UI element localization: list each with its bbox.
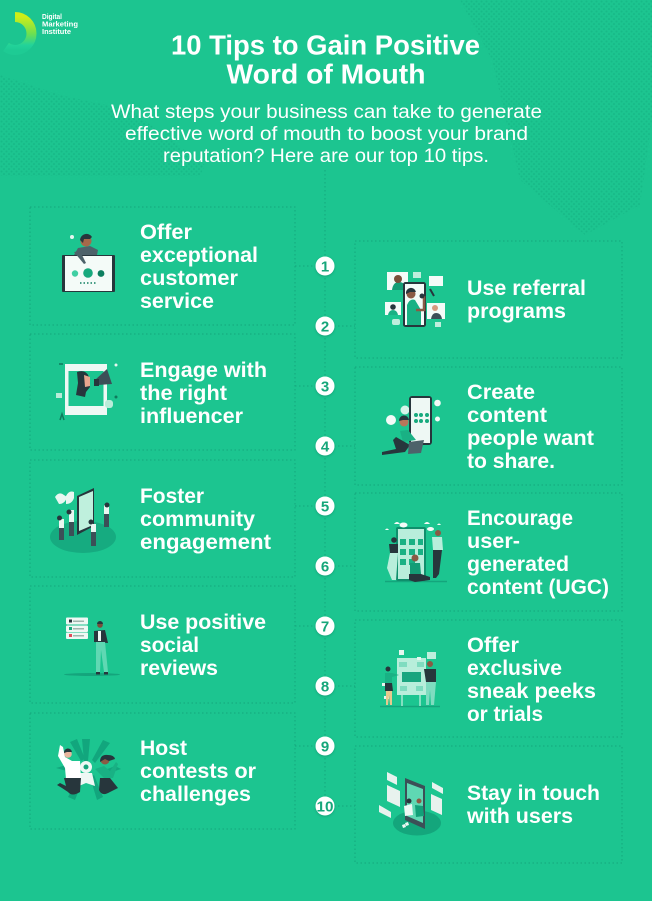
tip 8 text: user- (467, 529, 520, 553)
tip 2 text: Engage with (140, 358, 267, 382)
number badges: 5 (321, 498, 329, 515)
icon: tablet with person (62, 234, 115, 292)
tip 1 text: customer (140, 266, 239, 290)
tip 3 text: community (140, 507, 255, 531)
tip 10 text: Stay in touch (467, 781, 600, 805)
tip 1 text: Offer (140, 220, 193, 244)
tip 8 text: generated (467, 552, 569, 576)
title: 10 Tips to Gain Positive (171, 30, 480, 60)
panel: tip 2 (30, 334, 295, 450)
icon: person with review cards (64, 618, 120, 676)
tip 8 text: Encourage (467, 506, 573, 530)
intro text: effective word of mouth to boost your brand (125, 124, 528, 145)
tip 1 text: service (140, 289, 214, 313)
panel: tip 3 (30, 460, 295, 577)
tip 8 text: content (UGC) (467, 575, 609, 599)
tip 9 text: Offer (467, 633, 520, 657)
number badges: 9 (321, 738, 329, 755)
tip 6 text (467, 276, 586, 323)
tip 7 text: people want (467, 426, 594, 450)
panel: tip 7 (355, 367, 622, 485)
logo: Institute (42, 27, 71, 36)
halftone pattern: top right (460, 0, 652, 235)
panel: tip 8 (355, 493, 622, 611)
panel: tip 9 (355, 620, 622, 737)
tip 10 text (466, 781, 600, 828)
number badges: 1 (321, 258, 329, 275)
number badges: 2 (321, 318, 329, 335)
title: Word of Mouth (226, 58, 426, 90)
icon: community around phone (50, 488, 116, 553)
tip 1 text: exceptional (140, 243, 258, 267)
panel: tip 6 (355, 241, 622, 358)
tip 9 text: exclusive (467, 656, 562, 680)
intro text: reputation? Here are our top 10 tips. (163, 146, 489, 167)
number badges: 4 (321, 438, 330, 455)
icon: influencer frame with megaphone (56, 364, 118, 420)
panel: tip 10 (355, 746, 622, 863)
icon: person seated by phone (382, 396, 441, 455)
tip 9 text: or trials (467, 702, 543, 726)
tip 7 text: to share. (467, 449, 555, 473)
tip 4 text (140, 610, 266, 680)
icon: phone with referral cards (385, 272, 445, 327)
tip 7 text: Create (467, 380, 535, 404)
logo: Marketing (42, 20, 78, 28)
icon: group with large phone (385, 522, 447, 582)
intro text (111, 102, 542, 167)
tip 9 text (467, 633, 596, 726)
tip 5 text (140, 736, 257, 806)
tip 1 text (140, 220, 258, 313)
tip 3 text: engagement (140, 530, 271, 554)
tip 7 text: content (467, 403, 547, 427)
icon: people at display board (380, 650, 440, 706)
tip 2 text: influencer (140, 404, 244, 428)
number badges: 10 (316, 798, 334, 815)
number badges: 3 (321, 378, 329, 395)
icon: people jumping with award (56, 739, 121, 800)
tip 2 text (140, 358, 267, 428)
vertical timeline (295, 170, 355, 810)
tip 5 text: Host (140, 736, 187, 760)
panel: tip 5 (30, 713, 295, 829)
number badges (316, 256, 334, 816)
tip 7 text (467, 380, 594, 473)
number badges: 7 (321, 618, 329, 635)
tip 5 text: contests or (140, 759, 257, 783)
tip 4 text: Use positive (140, 610, 266, 634)
tip 6 text: programs (467, 299, 566, 323)
halftone pattern: left (0, 75, 205, 176)
tip 4 text: social (140, 633, 199, 657)
number badges: 6 (321, 558, 329, 575)
number badges: 8 (321, 678, 329, 695)
tip 6 text: Use referral (467, 276, 586, 300)
tip 9 text: sneak peeks (467, 679, 596, 703)
logo: Digital (42, 12, 62, 21)
tip 3 text (140, 484, 271, 554)
tip 10 text: with users (466, 804, 573, 828)
logo (6, 12, 78, 50)
tip 8 text (467, 506, 609, 599)
panel: tip 1 (30, 207, 295, 325)
tip 3 text: Foster (140, 484, 205, 508)
panel: tip 4 (30, 586, 295, 703)
tip 4 text: reviews (140, 656, 218, 680)
tip 5 text: challenges (140, 782, 251, 806)
title (171, 30, 480, 90)
intro text: What steps your business can take to generate (111, 102, 542, 123)
tip 2 text: the right (140, 381, 227, 405)
icon: isometric phone with messages (379, 772, 443, 836)
